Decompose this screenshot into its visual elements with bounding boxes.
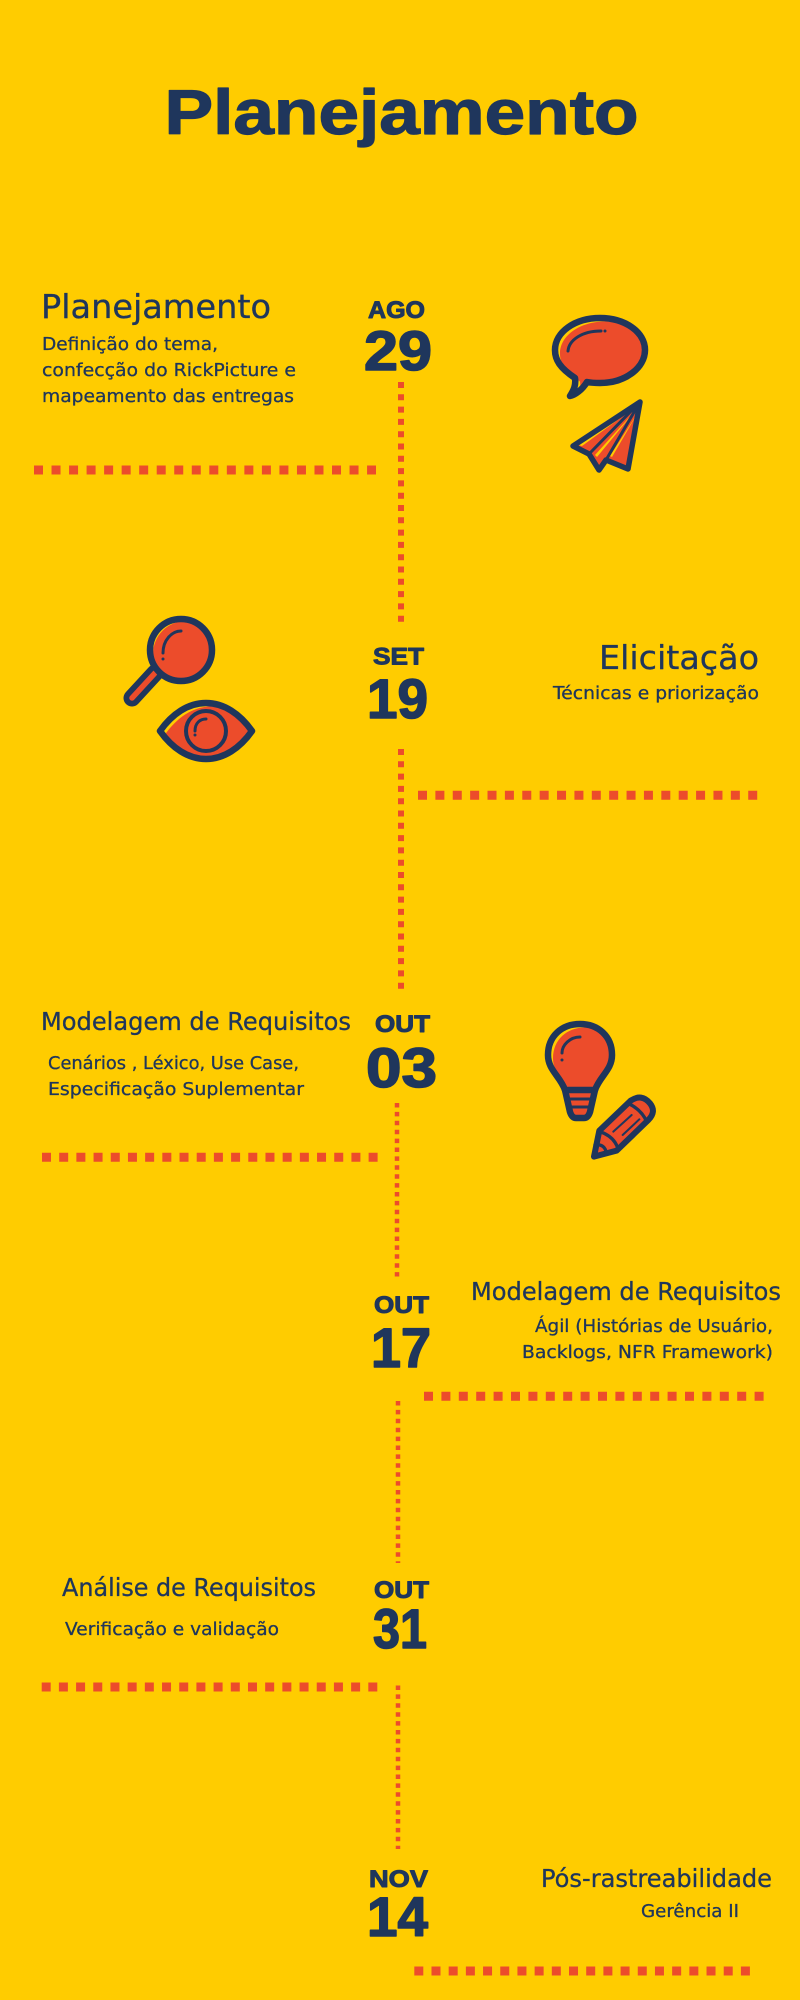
date: OUT 17: OUT	[374, 1292, 429, 1319]
date: AGO 29: AGO	[368, 297, 425, 324]
milestone 1: Planejamento text: Definição do tema,	[42, 335, 218, 355]
date: AGO 29	[364, 297, 432, 382]
milestone 6: Pos-rastreabilidade text	[541, 1864, 772, 1922]
milestone 6: Pos-rastreabilidade text: Gerência II	[641, 1902, 739, 1922]
milestone 2: Elicitação text: Técnicas e priorização	[552, 684, 759, 704]
milestone 2: Elicitação text	[552, 638, 759, 704]
date: OUT 31: OUT	[374, 1577, 429, 1604]
icon: paper plane	[573, 402, 640, 470]
date: NOV 14: NOV	[369, 1866, 428, 1893]
milestone 2: Elicitação text: Elicitação	[599, 638, 759, 677]
date: OUT 31: 31	[373, 1597, 427, 1660]
date: SET 19: 19	[367, 667, 428, 730]
icon: magnifier	[132, 619, 219, 698]
milestone 3: Modelagem de Requisitos text: Cenários , Léxico, Use Case,	[48, 1054, 299, 1074]
icon: light bulb	[548, 1024, 620, 1118]
milestone 3: Modelagem de Requisitos text: Especificação Suplementar	[48, 1080, 305, 1100]
icon: pencil	[594, 1098, 653, 1157]
milestone 4: Modelagem de Requisitos Agil text	[471, 1277, 781, 1363]
date: OUT 17: 17	[371, 1316, 431, 1379]
date: OUT 03: OUT	[375, 1011, 430, 1038]
milestone 5: Analise de Requisitos text	[62, 1573, 316, 1640]
milestone 1: Planejamento text: confecção do RickPicture e	[42, 361, 296, 381]
date: NOV 14: 14	[367, 1885, 428, 1948]
milestone 4: Modelagem de Requisitos Agil text: Ágil (Histórias de Usuário,	[535, 1315, 773, 1337]
milestone 1: Planejamento text	[41, 287, 296, 407]
milestone 1: Planejamento text: Planejamento	[41, 287, 271, 326]
milestone 5: Analise de Requisitos text: Verificação e validação	[65, 1620, 279, 1640]
date: OUT 03: 03	[366, 1036, 437, 1099]
milestone 4: Modelagem de Requisitos Agil text: Backlogs, NFR Framework)	[522, 1343, 773, 1363]
title: Planejamento	[164, 78, 638, 148]
icon: speech bubble	[555, 318, 650, 400]
milestone 4: Modelagem de Requisitos Agil text: Modelagem de Requisitos	[471, 1277, 781, 1306]
icon: eye	[160, 703, 257, 762]
date: OUT 03	[366, 1011, 437, 1099]
date: SET 19: SET	[373, 644, 424, 670]
date: AGO 29: 29	[364, 319, 432, 382]
milestone 6: Pos-rastreabilidade text: Pós-rastreabilidade	[541, 1864, 772, 1893]
timeline connectors	[34, 382, 764, 1971]
milestone 3: Modelagem de Requisitos text	[41, 1007, 351, 1100]
milestone 3: Modelagem de Requisitos text: Modelagem de Requisitos	[41, 1007, 351, 1036]
milestone 5: Analise de Requisitos text: Análise de Requisitos	[62, 1573, 316, 1602]
milestone 1: Planejamento text: mapeamento das entregas	[42, 387, 294, 407]
